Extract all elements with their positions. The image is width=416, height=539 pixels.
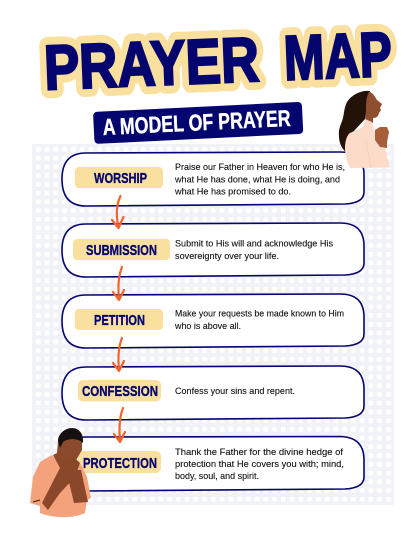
description: submission: Submit to His will and acknowledge His bbox=[175, 238, 333, 250]
subtitle banner: A MODEL OF PRAYER bbox=[102, 105, 291, 140]
arrow: submission to petition bbox=[113, 267, 124, 300]
description: protection: protection that He covers you with; mind, bbox=[175, 459, 344, 470]
title: PRAYER bbox=[43, 25, 260, 103]
label: protection bbox=[78, 451, 161, 473]
title: PRAYER bbox=[43, 25, 260, 103]
description: petition: who is above all. bbox=[174, 321, 241, 332]
label: petition: PETITION bbox=[94, 312, 145, 329]
label: protection: PROTECTION bbox=[83, 455, 157, 472]
arrow: confession to protection bbox=[114, 408, 125, 442]
label: submission bbox=[73, 239, 170, 260]
description: protection: body, soul, and spirit. bbox=[175, 471, 259, 482]
card: petition bbox=[62, 294, 364, 348]
description: worship: what He has promised to do. bbox=[174, 186, 291, 198]
label: worship: WORSHIP bbox=[94, 170, 147, 187]
description: worship: Praise our Father in Heaven for who He is, bbox=[175, 162, 345, 173]
background dotted panel bbox=[32, 144, 394, 505]
description: protection: Thank the Father for the divine hedge of bbox=[175, 447, 343, 458]
illustration: praying woman bbox=[339, 91, 390, 168]
description: confession: Confess your sins and repent. bbox=[175, 386, 295, 397]
card: worship bbox=[62, 152, 364, 206]
description: petition: Make your requests be made known to Him bbox=[175, 308, 344, 320]
illustration: praying man bbox=[30, 428, 91, 517]
label: confession bbox=[78, 380, 161, 402]
label: submission: SUBMISSION bbox=[86, 242, 157, 259]
card: confession bbox=[62, 366, 364, 420]
label: worship bbox=[75, 167, 163, 188]
description: worship: what He has done, what He is doing, and bbox=[174, 174, 340, 186]
arrow: worship to submission bbox=[112, 196, 124, 228]
description: submission: sovereignty over your life. bbox=[175, 251, 279, 262]
card: protection bbox=[62, 436, 364, 491]
card: submission bbox=[62, 223, 364, 277]
label: petition bbox=[75, 309, 163, 330]
arrow: petition to confession bbox=[113, 338, 124, 371]
label: confession: CONFESSION bbox=[82, 383, 158, 400]
